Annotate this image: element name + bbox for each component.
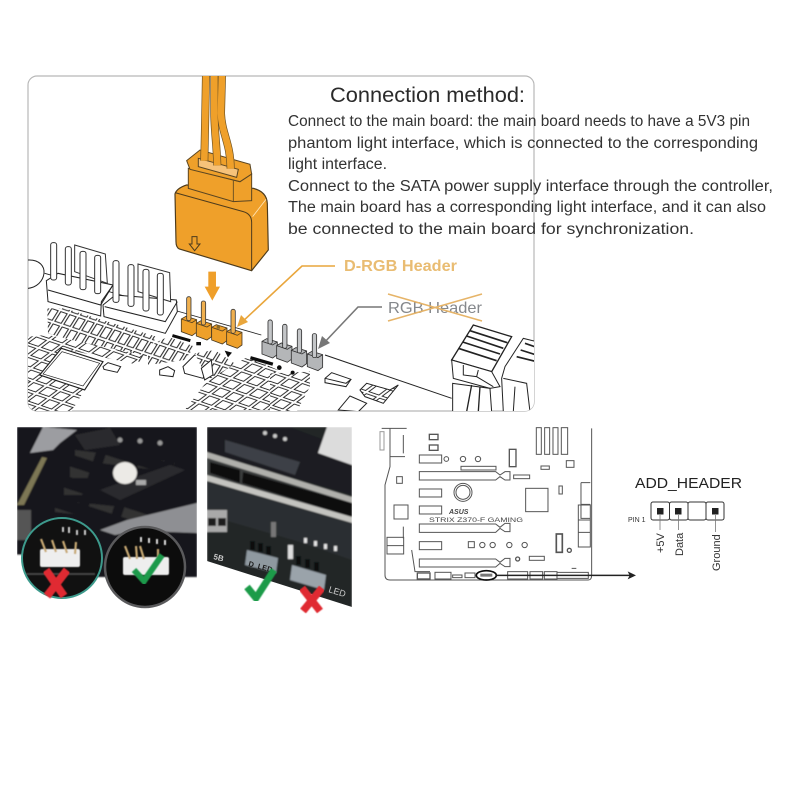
panel: close-up photo of headers [207,427,352,611]
logo text on board: STRIX Z370-F GAMING [429,517,523,524]
illustration: motherboard line art [28,243,288,412]
diagram: ADD_HEADER pinout: +5V [655,532,667,553]
illustration: right side board line art [270,325,537,412]
coin battery [113,462,137,484]
callout circle: correct connection [105,527,185,607]
logo text on board: ASUS [448,509,469,516]
text block: connection instructions: light interface. [288,156,387,173]
callout: crossed out RGB Header [318,294,483,349]
icon: red cross [46,570,67,596]
diagram: motherboard layout [380,428,592,580]
connector body [175,185,268,271]
diagram: ADD_HEADER pinout: ADD_HEADER [635,476,742,492]
white chips [207,510,227,532]
text block: connection instructions: The main board has a corresponding light interface, and it can also [288,199,766,216]
callout circle: wrong connection [22,518,102,598]
callout: crossed out RGB Header: RGB Header [388,300,483,317]
icon: green check [247,570,274,598]
text block: connection instructions [288,113,773,238]
diagram: ADD_HEADER pinout: PIN 1 [628,517,646,524]
grey RGB header pins [250,320,323,375]
text block: connection instructions: Connect to the main board: the main board needs to have a 5V3 pin [288,113,750,130]
diagram: ADD_HEADER pinout [628,476,742,571]
connector neck [188,168,252,202]
cable strands [204,75,231,169]
panel: close-up photo of headers: LED [327,584,348,599]
text block: connection instructions: Connect to the SATA power supply interface through the controller, [288,178,773,195]
paper label [318,427,352,465]
diagram: ADD_HEADER pinout: Data [674,532,686,556]
panel: close-up photo of headers: D_LED [247,559,274,574]
small board marks [172,334,232,357]
fan header pins [51,243,171,315]
text block: connection instructions: phantom light interface, which is connected to the corresponding [288,135,758,152]
logo text on board [429,509,523,524]
panel: close-up photo of headers: 5B [213,552,225,563]
icon: red cross [302,588,322,611]
panel: photo of motherboard with wrong and right connection [17,427,197,607]
small arrow on connector [189,237,200,251]
title: Connection method: [330,84,525,107]
callout: D-RGB Header: D-RGB Header [344,258,457,275]
illustration: orange cable and connector [175,75,268,301]
diagram: ADD_HEADER pinout: Ground [711,534,723,571]
D_LED label strips [245,550,278,573]
arrow: header location callout [476,571,636,580]
slot rails [207,452,352,503]
text block: connection instructions: be connected to the main board for synchronization. [288,221,694,238]
connector rim [187,150,252,182]
panel: D-RGB header diagram [28,75,537,412]
callout: D-RGB Header [237,258,457,327]
orange D-RGB header pins [172,297,242,357]
icon: green check [134,555,162,581]
big down arrow [205,272,220,301]
